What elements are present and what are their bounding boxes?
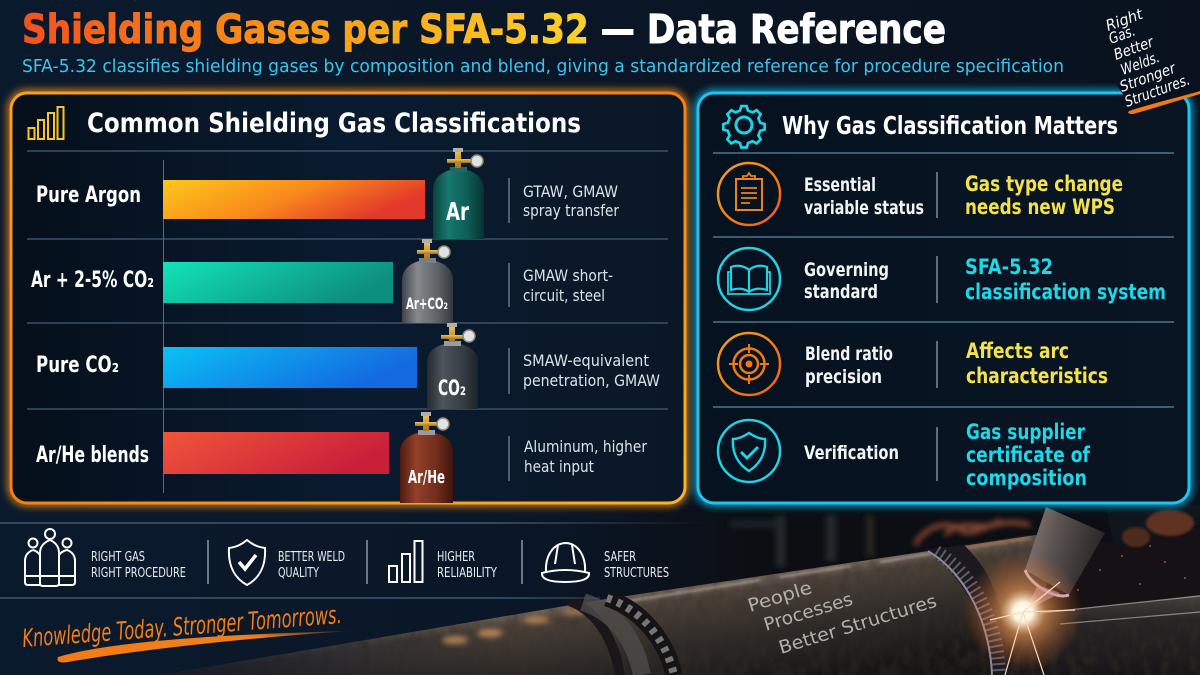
row: essential variable status: variable status — [804, 197, 924, 219]
benefit: safer structures: SAFER — [604, 550, 636, 565]
row: Pure Argon: spray transfer — [523, 201, 619, 220]
row: Ar + 2-5% CO2 — [31, 239, 613, 323]
row: verification: Verification — [804, 442, 899, 464]
callout: top-right handwritten note: Welds. — [1118, 48, 1162, 79]
background photo: welded pipe and torch — [161, 505, 1200, 675]
row: Ar/He blends: heat input — [524, 457, 594, 476]
row: blend ratio precision — [718, 333, 1108, 395]
row: Pure CO2: penetration, GMAW — [523, 371, 660, 390]
icon: CO2 cylinder — [427, 323, 478, 409]
benefit: right gas: RIGHT GAS — [91, 550, 145, 565]
icon: gas cylinders — [25, 529, 75, 586]
row: governing standard: standard — [804, 281, 878, 303]
icon: bars — [389, 541, 422, 582]
icon: CO2 cylinder: CO₂ — [438, 376, 466, 400]
icon: argon helium cylinder: Ar/He — [408, 467, 445, 488]
icon: argon helium cylinder — [400, 412, 453, 503]
row: Pure CO2 — [36, 323, 660, 409]
icon: target — [718, 333, 780, 395]
row: verification: Gas supplier — [966, 420, 1086, 444]
row: blend ratio precision: characteristics — [966, 364, 1108, 388]
pipe text: People Processes Better Structures — [745, 577, 939, 659]
icon: argon cylinder — [433, 148, 484, 239]
benefit: safer structures — [604, 550, 669, 581]
icon: gear — [723, 106, 765, 148]
title: Shielding Gases per SFA-5.32 — Data Reference — [22, 7, 946, 53]
panel: common shielding gas classifications — [11, 93, 685, 503]
callout: top-right handwritten note — [1103, 4, 1200, 114]
pipe text: People Processes Better Structures: Processes — [761, 589, 855, 636]
icon: argon CO2 cylinder — [402, 239, 453, 323]
icon: argon CO2 cylinder: Ar+CO₂ — [406, 294, 448, 313]
callout: top-right handwritten note: Gas. — [1106, 22, 1138, 48]
row: essential variable status: Gas type change — [965, 172, 1123, 196]
row: essential variable status: needs new WPS — [965, 195, 1115, 219]
pipe text: People Processes Better Structures: Better Structures — [776, 591, 939, 659]
benefit: right gas — [91, 550, 186, 581]
subtitle: SFA-5.32 classifies shielding gases by composition and blend, giving a standardized reference for procedure specification — [22, 56, 1064, 77]
tagline: Knowledge Today. Stronger Tomorrows. — [21, 600, 343, 653]
strip: bottom benefits — [0, 523, 710, 598]
heading: common classifications: Common Shielding Gas Classifications — [87, 108, 581, 139]
icon: hard hat — [542, 543, 589, 582]
row: Ar + 2-5% CO2: circuit, steel — [523, 286, 605, 305]
benefit: better weld — [278, 550, 345, 581]
benefit: higher reliability: RELIABILITY — [437, 566, 497, 581]
swoosh under tagline — [57, 631, 350, 662]
icon: shield check — [718, 420, 780, 482]
row: Ar + 2-5% CO2: GMAW short- — [523, 266, 613, 285]
row: governing standard: SFA-5.32 — [965, 255, 1053, 279]
icon: argon cylinder: Ar — [446, 197, 469, 226]
row: Pure Argon: Pure Argon — [36, 183, 141, 208]
panel: why gas classification matters — [698, 93, 1189, 503]
row: governing standard — [718, 248, 1166, 310]
icon: shield — [229, 540, 265, 585]
callout: top-right handwritten note: Stronger — [1117, 59, 1179, 96]
row: essential variable status — [718, 163, 1123, 225]
row: Ar/He blends: Aluminum, higher — [524, 437, 647, 456]
benefit: better weld: QUALITY — [278, 566, 319, 581]
callout: top-right handwritten note: Better — [1111, 33, 1157, 64]
row: Ar/He blends: Ar/He blends — [36, 443, 149, 468]
row: Pure CO2: SMAW-equivalent — [523, 351, 649, 370]
row: verification — [718, 420, 1091, 490]
row: blend ratio precision: Affects arc — [966, 339, 1069, 363]
callout: top-right handwritten note: Right — [1103, 4, 1146, 35]
benefit: better weld: BETTER WELD — [278, 550, 345, 565]
row: verification: certificate of — [966, 443, 1091, 467]
pipe text: People Processes Better Structures: People — [745, 577, 815, 617]
tagline — [21, 600, 350, 662]
row: essential variable status: Essential — [804, 174, 876, 196]
swoosh under note — [1128, 91, 1200, 114]
row: blend ratio precision: Blend ratio — [805, 343, 893, 365]
row: Pure CO2: Pure CO₂ — [36, 353, 119, 378]
icon: clipboard — [718, 163, 780, 225]
row: Ar + 2-5% CO2: Ar + 2-5% CO₂ — [31, 268, 154, 293]
row: Ar/He blends — [36, 412, 647, 503]
benefit: higher reliability — [437, 550, 497, 581]
benefit: right gas: RIGHT PROCEDURE — [91, 566, 186, 581]
benefit: higher reliability: HIGHER — [437, 550, 475, 565]
benefit: safer structures: STRUCTURES — [604, 566, 669, 581]
row: blend ratio precision: precision — [805, 366, 882, 388]
row: Pure Argon — [36, 148, 619, 239]
row: Pure Argon: GTAW, GMAW — [523, 182, 618, 201]
icon: bar chart — [28, 107, 64, 139]
row: verification: composition — [966, 466, 1087, 490]
row: governing standard: Governing — [804, 259, 889, 281]
icon: open book — [718, 248, 780, 310]
